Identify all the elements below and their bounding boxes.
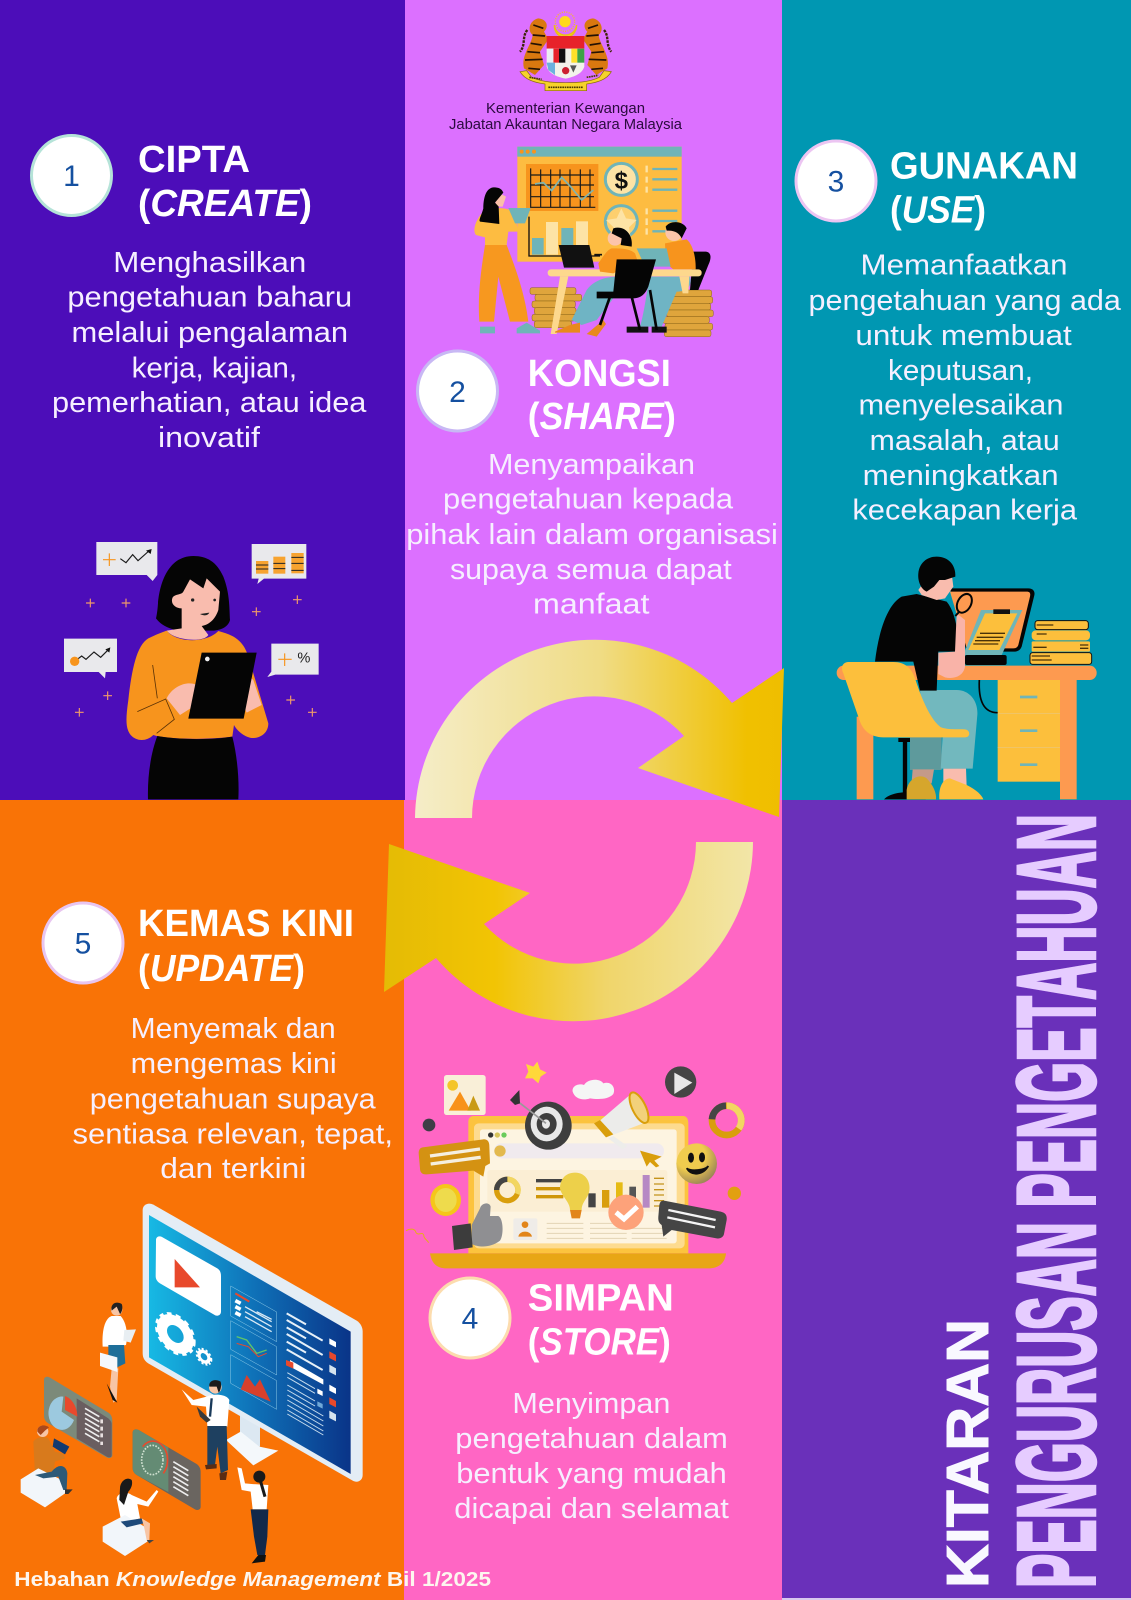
tablet — [188, 653, 257, 719]
cursor — [640, 1151, 662, 1167]
step 2 number badge: 2 — [449, 376, 466, 409]
torso — [875, 594, 959, 691]
step 3 description: keputusan, — [888, 355, 1033, 387]
step 1 description: inovatif — [158, 422, 261, 454]
arm — [938, 613, 965, 678]
step 5 description: dan terkini — [160, 1153, 306, 1185]
step 3 number badge — [796, 141, 876, 221]
step 3 description: masalah, atau — [870, 425, 1060, 457]
step 4 description: dicapai dan selamat — [454, 1493, 729, 1525]
step 3 description: menyelesaikan — [858, 390, 1064, 422]
seated man — [33, 1437, 65, 1475]
step 3 heading — [890, 146, 1078, 232]
step 3 description: meningkatkan — [863, 460, 1059, 492]
panel: simpan background — [404, 800, 782, 1600]
donut inner chart — [497, 1179, 518, 1201]
illustration: woman with tablet and data bubbles — [64, 542, 319, 799]
step 2 description: pihak lain dalam organisasi — [406, 519, 778, 551]
play button — [665, 1066, 696, 1098]
donut outer — [712, 1106, 741, 1135]
step 5 description — [72, 1013, 393, 1185]
step 5 heading: KEMAS KINI — [138, 903, 354, 945]
step 2 heading: KONGSI — [528, 353, 671, 395]
step 1 heading: (CREATE) — [138, 183, 312, 225]
check badge — [608, 1195, 644, 1230]
step 4 heading: SIMPAN — [528, 1278, 674, 1320]
shoes — [907, 776, 936, 799]
ministry name text: Jabatan Akauntan Negara Malaysia — [449, 116, 683, 133]
step 5 description: mengemas kini — [131, 1048, 337, 1080]
table — [548, 269, 702, 276]
magnifier — [954, 591, 975, 615]
target — [525, 1102, 572, 1150]
step 2 heading: (SHARE) — [528, 396, 676, 438]
ministry name text — [449, 100, 683, 133]
left speech bubble — [419, 1139, 490, 1177]
step 2 number badge — [418, 351, 498, 431]
footer text: Hebahan Knowledge Management Bil 1/2025 — [14, 1569, 491, 1591]
laptop body — [468, 1116, 688, 1253]
illustration: man reviewing document at desk — [837, 557, 1097, 799]
front seated person — [598, 248, 637, 273]
step 2 description: manfaat — [533, 588, 649, 620]
panel: kongsi background — [405, 0, 782, 800]
step 4 number badge: 4 — [462, 1302, 478, 1336]
step 3 number badge: 3 — [828, 166, 844, 198]
step 1 description — [52, 247, 367, 454]
orange dot — [728, 1187, 741, 1200]
title: kitaran: KITARAN — [935, 1319, 1001, 1588]
books — [1035, 621, 1088, 630]
small chart panels — [44, 1377, 112, 1458]
illustration: team at finance dashboard: $ — [615, 167, 628, 194]
lower cards — [513, 1218, 537, 1240]
step 3 description: Memanfaatkan — [860, 250, 1068, 282]
step 3 heading: (USE) — [890, 190, 986, 232]
light bulb — [560, 1173, 590, 1210]
browser dots and search — [488, 1132, 493, 1138]
sweater — [126, 631, 268, 740]
step 2 description: supaya semua dapat — [450, 554, 732, 586]
smiley — [676, 1143, 717, 1184]
step 2 description: Menyampaikan — [488, 449, 695, 481]
monitor — [950, 588, 1035, 652]
step 3 heading: GUNAKAN — [890, 146, 1078, 188]
cloud — [573, 1080, 614, 1099]
gears — [157, 1308, 194, 1360]
monitor frame — [143, 1204, 363, 1482]
coin — [430, 1184, 461, 1216]
small dark ball — [423, 1119, 435, 1131]
star — [525, 1062, 547, 1083]
coin stacks — [530, 288, 713, 337]
step 3 description: pengetahuan yang ada — [808, 285, 1122, 317]
step 5 description: sentiasa relevan, tepat, — [72, 1119, 393, 1151]
thumbs up — [472, 1203, 503, 1247]
step 5 heading: (UPDATE) — [138, 948, 305, 990]
panels on screen — [231, 1286, 277, 1409]
standing woman — [479, 245, 528, 322]
legs — [910, 737, 942, 770]
panel: cipta background — [0, 0, 405, 800]
chair seat — [842, 662, 969, 737]
panel: kemas kini background — [0, 800, 404, 1600]
arrow: top cycle arrow — [415, 640, 784, 818]
step 4 description: Menyimpan — [512, 1388, 670, 1420]
ministry emblem — [520, 12, 611, 91]
chair — [597, 259, 656, 298]
step 1 number badge — [32, 136, 112, 216]
laptop — [559, 245, 594, 268]
drawers — [998, 680, 1060, 782]
step 1 heading — [138, 139, 312, 225]
step 2 description — [406, 449, 778, 620]
step 5 description: pengetahuan supaya — [90, 1084, 377, 1116]
head — [918, 573, 953, 600]
chat bubbles — [64, 542, 319, 678]
video card — [156, 1236, 221, 1316]
clipboard — [963, 610, 1022, 655]
dashboard board — [517, 147, 682, 262]
step 1 description: melalui pengalaman — [72, 317, 348, 349]
seated woman — [117, 1490, 158, 1523]
squiggle — [406, 1229, 429, 1243]
right speech bubble — [658, 1201, 727, 1238]
sparkles — [75, 595, 317, 717]
step 3 description: kecekapan kerja — [852, 495, 1078, 527]
hands — [167, 671, 262, 715]
step 4 heading: (STORE) — [528, 1322, 671, 1364]
rear seated person — [690, 252, 711, 290]
chair stem — [898, 738, 911, 795]
step 1 description: pengetahuan baharu — [67, 282, 352, 314]
step 1 heading: CIPTA — [138, 139, 250, 181]
step 2 description: pengetahuan kepada — [443, 484, 734, 516]
arrow: bottom cycle arrow — [384, 842, 753, 1021]
step 1 description: kerja, kajian, — [132, 352, 297, 384]
step 3 description — [808, 250, 1122, 527]
step 5 heading — [138, 903, 354, 990]
step 4 description: bentuk yang mudah — [456, 1458, 727, 1490]
step 4 description: pengetahuan dalam — [455, 1423, 728, 1455]
step 1 description: pemerhatian, atau idea — [52, 387, 367, 419]
step 4 number badge — [430, 1278, 510, 1358]
megaphone — [608, 1136, 627, 1149]
illustration: 3D laptop with marketing icons — [406, 1062, 741, 1268]
face and neck — [167, 578, 220, 640]
woman raising hand — [237, 1467, 268, 1509]
illustration: team at finance dashboard — [474, 147, 713, 337]
screen — [149, 1215, 351, 1474]
illustration: team around large monitor — [21, 1204, 363, 1563]
step 5 number badge — [43, 903, 123, 983]
ministry name text: Kementerian Kewangan — [486, 100, 645, 117]
step 1 description: Menghasilkan — [113, 247, 306, 279]
step 4 heading — [528, 1278, 674, 1364]
bars — [588, 1193, 596, 1207]
monitor stand — [240, 1413, 260, 1447]
step 5 description: Menyemak dan — [131, 1013, 336, 1045]
panel: gunakan background — [782, 0, 1131, 800]
panel: title background — [782, 800, 1131, 1600]
step 3 description: untuk membuat — [855, 320, 1072, 352]
step 1 number badge: 1 — [63, 160, 80, 193]
skirt — [148, 736, 239, 799]
step 2 heading — [528, 353, 676, 438]
presenting man — [182, 1389, 229, 1427]
standing woman with briefcase — [102, 1316, 127, 1347]
step 5 number badge: 5 — [75, 928, 91, 960]
illustration: woman with tablet and data bubbles: % — [297, 651, 310, 667]
step 4 description — [454, 1388, 729, 1525]
picture icon — [444, 1075, 486, 1115]
hair — [156, 556, 230, 631]
desk — [837, 666, 1097, 680]
